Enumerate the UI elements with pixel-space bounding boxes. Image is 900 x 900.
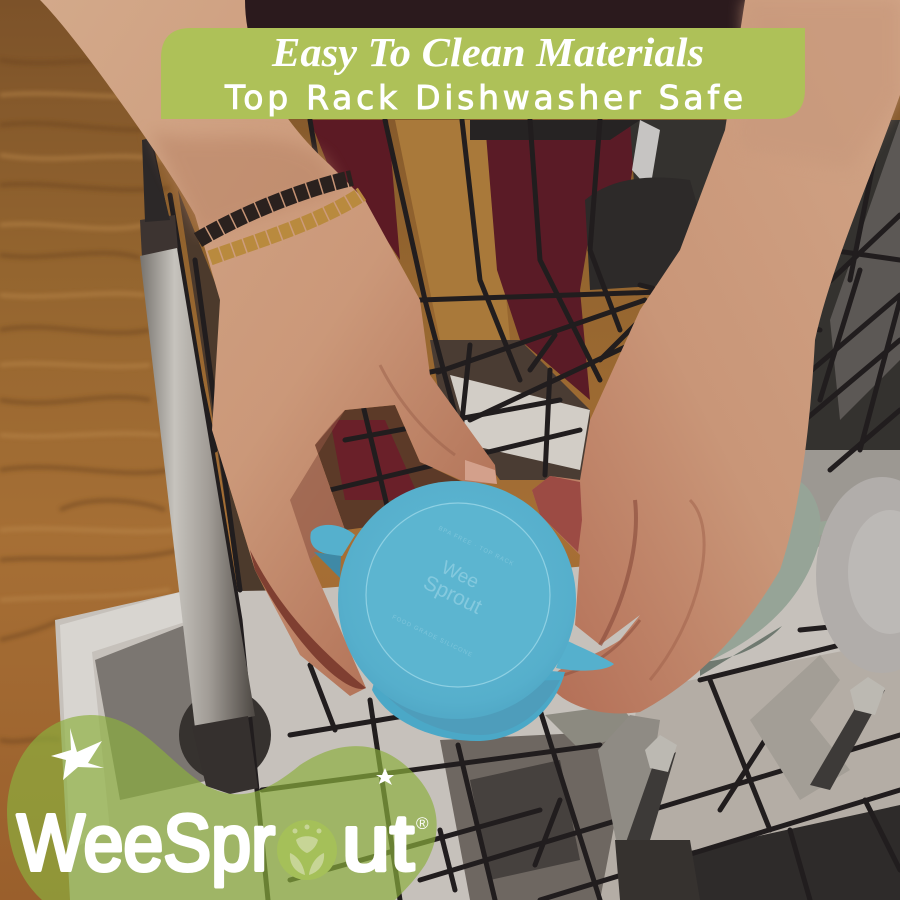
icon: small star (376, 768, 394, 785)
dishwasher machine interior right (470, 120, 900, 560)
left arm and hand (40, 0, 497, 696)
dishwasher handle (140, 138, 258, 794)
embossed logo on cup: Wee (438, 557, 482, 593)
cup left handle (310, 525, 355, 556)
embossed logo on cup: FOOD GRADE SILICONE (391, 615, 474, 659)
dish rack wires (150, 120, 900, 900)
bracelets (198, 178, 362, 258)
cup right handle (556, 640, 614, 671)
banner (161, 28, 805, 119)
blue silicone cup (310, 481, 614, 741)
icon: sprout o (277, 820, 337, 880)
logo wordmark: WeeSpr (17, 798, 275, 887)
suction bowl (816, 477, 900, 673)
sink and lower dishwasher floor (55, 375, 900, 900)
icon: large star (51, 728, 104, 780)
maroon trousers behind rack (240, 0, 745, 500)
embossed logo on cup (391, 525, 517, 659)
prong holders bottom right (598, 655, 885, 900)
banner subtitle: Top Rack Dishwasher Safe (224, 78, 743, 117)
green sippy cup (700, 478, 851, 676)
logo blob (7, 715, 437, 900)
dark rack backdrop between handle and hand (178, 190, 590, 700)
embossed logo on cup: BPA FREE · TOP RACK (437, 526, 515, 568)
logo wordmark end: ut (342, 798, 414, 887)
banner title: Easy To Clean Materials (271, 29, 704, 75)
embossed logo on cup: Sprout (420, 571, 486, 619)
registered mark: ® (416, 814, 429, 833)
right arm and hand (532, 0, 900, 713)
